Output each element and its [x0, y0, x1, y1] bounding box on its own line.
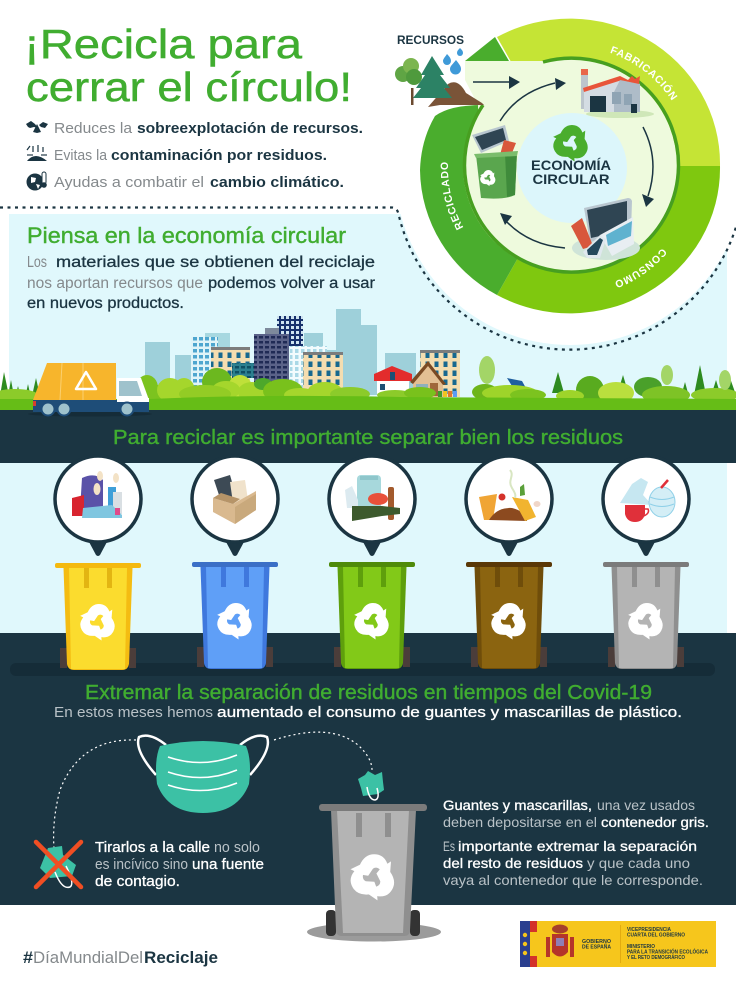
recursos entry area — [465, 61, 560, 120]
bin: brown — [466, 562, 552, 669]
text block: materiales: nos aportan recursos que — [27, 275, 203, 292]
arrow: factory to consumption — [642, 127, 654, 207]
benefit: contaminación — [27, 145, 327, 164]
text block: importante extremar: del resto de residuos — [443, 855, 583, 871]
logo: gobierno de españa: VICEPRESIDENCIA — [627, 927, 671, 933]
label: reciclado: RECICLADO — [440, 162, 464, 230]
coat of arms — [546, 924, 574, 957]
title: cerrar el círculo! — [26, 64, 352, 110]
green ground — [0, 396, 736, 411]
callout: rest — [603, 456, 689, 556]
arrow: resources to factory — [473, 76, 520, 89]
text block: materiales: materiales que se obtienen del reciclaje — [56, 254, 375, 271]
text block: guantes y mascarillas: una vez usados — [597, 797, 695, 813]
text block: importante extremar: importante extremar la separación — [458, 838, 697, 854]
dark section — [0, 633, 736, 905]
hashtag: Reciclaje — [144, 948, 218, 967]
benefit: contaminación: contaminación por residuos. — [111, 148, 327, 164]
logo: gobierno de españa: DE ESPAÑA — [582, 944, 611, 950]
text block: importante extremar: y que cada uno — [587, 855, 690, 871]
logo: gobierno de españa: PARA LA TRANSICIÓN ECOLÓGICA — [627, 948, 708, 956]
bin: grey covid — [307, 804, 441, 942]
text block: tirarlos a la calle — [95, 840, 264, 890]
background bushes — [0, 365, 736, 404]
benefit: sobreexplotación — [26, 121, 363, 137]
text block: guantes y mascarillas: deben depositarse en el — [443, 814, 597, 830]
benefit: sobreexplotación: sobreexplotación de recursos. — [137, 121, 363, 137]
text block: materiales: podemos volver a usar — [208, 275, 375, 292]
ring segment: fabricación — [497, 19, 720, 166]
heading: covid: Extremar la separación de residuos en tiempos del Covid-19 — [85, 682, 652, 704]
icon: recycle — [548, 125, 592, 164]
title: ¡Recicla para — [24, 21, 302, 67]
icon: face mask — [138, 736, 268, 813]
icon: factory — [581, 69, 654, 118]
hashtag: # — [23, 948, 34, 967]
text block: tirarlos a la calle: es incívico sino — [95, 857, 188, 873]
bin: green — [329, 562, 415, 669]
bin: blue — [192, 562, 278, 669]
benefit: cambio climático: Ayudas a combatir el — [54, 175, 204, 191]
dotted divider line — [0, 208, 736, 350]
icon: globe and thermometer — [26, 172, 47, 190]
text block: importante extremar — [443, 838, 703, 888]
text block: importante extremar: vaya al contenedor que le corresponde. — [443, 872, 703, 888]
panel: bins background — [0, 463, 727, 633]
small recycling bins — [438, 391, 457, 397]
icon: recycling bin with electronics — [472, 125, 518, 199]
callout: glass — [329, 456, 415, 556]
subheading: covid: aumentado el consumo de guantes y mascarillas de plástico. — [217, 704, 682, 721]
tan house — [410, 361, 446, 398]
icon: organic waste — [479, 470, 540, 521]
text block: materiales: Los — [27, 254, 47, 271]
text block: importante extremar: Es — [443, 838, 455, 854]
label: economía circular: CIRCULAR — [532, 171, 610, 187]
logo: gobierno de españa: CUARTA DEL GOBIERNO — [627, 932, 685, 938]
heading: para reciclar: Para reciclar es importante separar bien los residuos — [113, 427, 623, 449]
city skyline — [145, 309, 527, 400]
text block: guantes y mascarillas — [443, 797, 709, 830]
text block: guantes y mascarillas: Guantes y mascarillas, — [443, 797, 592, 813]
logo: gobierno de españa — [520, 921, 716, 967]
text block: tirarlos a la calle: Tirarlos a la calle — [95, 840, 210, 856]
solar panel — [507, 378, 527, 390]
label: consumo: CONSUMO — [616, 250, 666, 288]
shadow band under bins — [10, 663, 715, 676]
icon: plastic containers — [72, 471, 122, 518]
bin: yellow — [55, 563, 141, 670]
icon: resources — [26, 121, 48, 133]
callout: paper and cardboard — [192, 456, 278, 556]
dotted path: mask to street — [54, 740, 136, 848]
icon: crossed-out mask — [36, 842, 81, 887]
callout: plastics — [55, 456, 141, 556]
dark band: heading — [0, 410, 736, 463]
arrow: recycling to factory — [500, 78, 566, 121]
icon: cardboard box — [213, 475, 256, 524]
text block: tirarlos a la calle: de contagio. — [95, 874, 180, 890]
logo: gobierno de españa: MINISTERIO — [627, 944, 655, 950]
logo: gobierno de españa: GOBIERNO — [582, 939, 611, 945]
text block: tirarlos a la calle: no solo — [214, 840, 260, 856]
ring segment: consumo — [497, 166, 720, 313]
diagram: circular economy — [395, 18, 720, 314]
callout: organic — [466, 456, 552, 556]
trees right — [552, 365, 736, 395]
benefit: cambio climático: cambio climático. — [210, 175, 344, 191]
subheading: covid: En estos meses hemos — [54, 704, 213, 721]
ring segment: reciclado — [420, 105, 570, 295]
inner disc — [463, 59, 677, 273]
panel: circular economy background — [0, 0, 736, 411]
icon: glass containers — [345, 475, 400, 521]
text block: guantes y mascarillas: contenedor gris. — [601, 814, 709, 830]
heading: piensa en la economía circular: Piensa en la economía circular — [27, 223, 346, 248]
centre circle — [517, 113, 627, 223]
label: economía circular: ECONOMÍA — [531, 157, 611, 173]
logo: gobierno de españa: Y EL RETO DEMOGRÁFICO — [627, 954, 685, 961]
benefit: sobreexplotación: Reduces la — [54, 121, 133, 137]
icon: glove, mask and cup — [620, 478, 675, 522]
inner disc edge — [465, 58, 679, 272]
icon: natural resources — [395, 48, 484, 107]
subheading: covid — [54, 704, 682, 721]
hashtag: DíaMundialDel — [33, 948, 143, 967]
dotted path: mask to bin — [274, 732, 372, 770]
arrow: consumption to recycling — [500, 213, 565, 248]
icon: pollution — [27, 145, 47, 161]
ring tip — [465, 37, 509, 61]
hashtag — [23, 948, 218, 967]
red-roof house — [374, 366, 412, 398]
trees left — [0, 372, 40, 398]
benefit: cambio climático — [26, 172, 344, 191]
title — [24, 21, 352, 110]
tall bush — [479, 356, 495, 384]
truck — [28, 363, 152, 416]
label: economía circular — [531, 157, 611, 187]
icon: devices — [571, 198, 640, 260]
text block: materiales: en nuevos productos. — [27, 295, 184, 312]
bin: grey — [603, 562, 689, 669]
landscape — [0, 365, 736, 411]
label: fabricación: FABRICACIÓN — [610, 46, 678, 100]
text block: tirarlos a la calle: una fuente — [192, 857, 264, 873]
label: recursos: RECURSOS — [397, 35, 464, 47]
benefit: contaminación: Evitas la — [54, 148, 108, 164]
text block: materiales — [27, 254, 375, 312]
icon: crumpled mask by the bin — [358, 771, 384, 800]
